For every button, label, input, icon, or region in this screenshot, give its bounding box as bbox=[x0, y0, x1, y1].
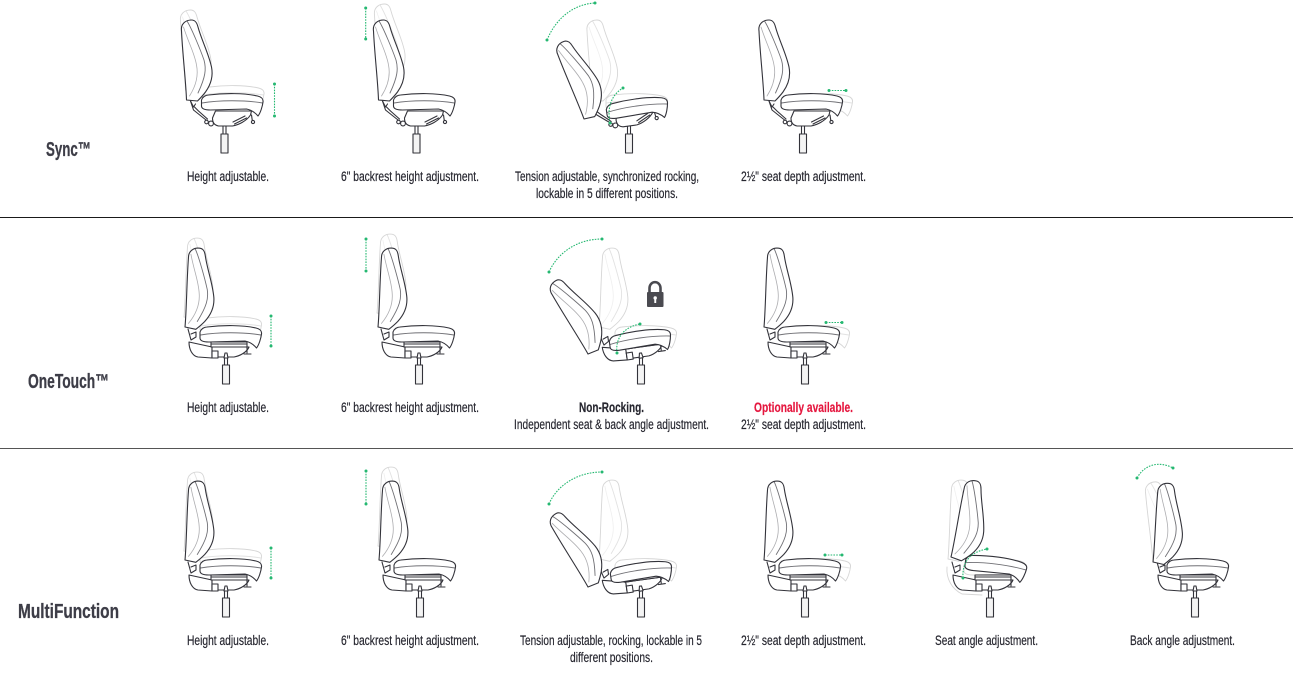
caption: lockable in 5 different positions. bbox=[536, 186, 678, 201]
arrow: height bbox=[273, 82, 276, 118]
chair illustration bbox=[179, 237, 262, 384]
arrow: backrest height bbox=[364, 6, 367, 40]
arrow: back recline arc bbox=[546, 2, 596, 42]
arrow: back angle arc bbox=[1136, 464, 1174, 480]
caption: 6" backrest height adjustment. bbox=[341, 169, 479, 184]
panel: MultiFunction row bbox=[18, 464, 1235, 665]
panel: Sync row bbox=[46, 2, 866, 201]
chair illustration bbox=[759, 247, 850, 384]
arrow: backrest height bbox=[364, 238, 368, 272]
feature: backrest height bbox=[341, 4, 479, 184]
feature: seat depth bbox=[741, 480, 866, 648]
arrow: seat depth bbox=[824, 321, 844, 324]
feature: non-rocking bbox=[514, 238, 709, 432]
arrow: back recline arc bbox=[548, 470, 604, 506]
feature: seat depth bbox=[741, 20, 866, 184]
caption bbox=[514, 400, 709, 432]
feature: seat angle bbox=[935, 478, 1038, 648]
feature: backrest height bbox=[341, 233, 479, 415]
caption bbox=[520, 633, 702, 665]
chair illustration bbox=[372, 233, 455, 384]
caption: different positions. bbox=[570, 650, 653, 665]
caption: 6" backrest height adjustment. bbox=[341, 633, 479, 648]
chair illustration bbox=[180, 10, 264, 153]
heading: MultiFunction: MultiFunction bbox=[18, 601, 119, 623]
caption: Tension adjustable, rocking, lockable in 5 bbox=[520, 633, 702, 648]
caption: Tension adjustable, synchronized rocking, bbox=[515, 169, 699, 184]
caption bbox=[741, 400, 866, 432]
caption: Height adjustable. bbox=[187, 169, 269, 184]
heading: Sync: Sync™ bbox=[46, 139, 91, 161]
caption: 2½" seat depth adjustment. bbox=[741, 633, 866, 648]
panel: OneTouch row bbox=[28, 233, 866, 432]
chair illustration bbox=[759, 480, 851, 617]
caption: Height adjustable. bbox=[187, 633, 269, 648]
arrow: height bbox=[270, 546, 272, 580]
caption: Independent seat & back angle adjustment. bbox=[514, 417, 709, 432]
feature: rocking bbox=[520, 470, 702, 665]
caption: Seat angle adjustment. bbox=[935, 633, 1038, 648]
feature: seat depth optional bbox=[741, 247, 866, 432]
chair illustration bbox=[373, 466, 456, 617]
chair illustration bbox=[554, 20, 670, 153]
arrow: seat angle arc bbox=[616, 322, 642, 354]
chair illustration bbox=[373, 4, 455, 153]
caption: 2½" seat depth adjustment. bbox=[741, 417, 866, 432]
chair illustration bbox=[547, 247, 677, 384]
feature: height adjustable bbox=[180, 10, 276, 184]
caption: 2½" seat depth adjustment. bbox=[741, 169, 866, 184]
feature: height adjustable bbox=[179, 471, 272, 648]
feature: synchronized rocking bbox=[515, 2, 699, 201]
chair illustration bbox=[943, 478, 1028, 617]
feature: height adjustable bbox=[179, 237, 272, 415]
chair illustration bbox=[179, 471, 262, 617]
caption: Non-Rocking. bbox=[579, 400, 644, 415]
arrow: back recline arc bbox=[548, 238, 604, 274]
arrow: seat rock arc bbox=[608, 86, 624, 124]
chair illustration bbox=[547, 479, 677, 617]
caption: Height adjustable. bbox=[187, 400, 269, 415]
caption: Back angle adjustment. bbox=[1130, 633, 1235, 648]
feature: backrest height bbox=[341, 466, 479, 648]
feature: back angle bbox=[1130, 464, 1235, 648]
arrow: seat depth bbox=[824, 554, 844, 556]
heading: OneTouch: OneTouch™ bbox=[28, 371, 109, 393]
caption: Optionally available. bbox=[754, 400, 853, 415]
arrow: height bbox=[270, 314, 272, 348]
arrow: backrest height bbox=[364, 470, 368, 506]
icon: padlock bbox=[647, 282, 664, 307]
chair illustration bbox=[759, 20, 853, 153]
divider lines bbox=[0, 217, 1293, 449]
chair illustration bbox=[1145, 481, 1229, 617]
caption bbox=[515, 169, 699, 201]
arrow: seat depth bbox=[828, 89, 848, 92]
arrow: seat angle arc bbox=[962, 548, 988, 580]
caption: 6" backrest height adjustment. bbox=[341, 400, 479, 415]
